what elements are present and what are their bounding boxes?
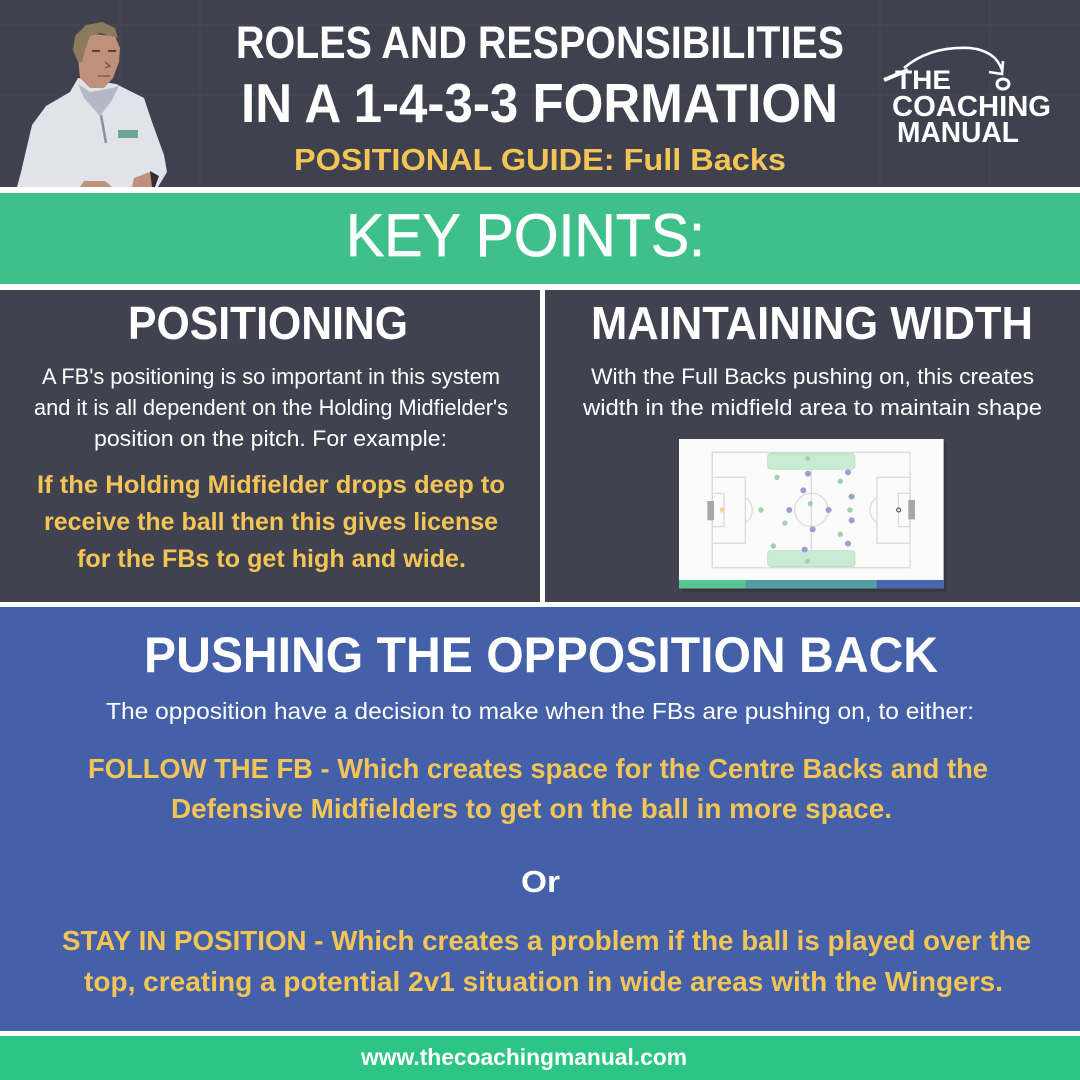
- logo: The Coaching Manual: COACHING: [892, 91, 1051, 123]
- text: positioning example: receive the ball then this gives license: [44, 508, 498, 536]
- panel: pushing the opposition back: [0, 607, 1080, 1031]
- heading: positioning: POSITIONING: [128, 297, 408, 349]
- text: positioning example: for the FBs to get high and wide.: [77, 545, 466, 573]
- footer: www.thecoachingmanual.com: [360, 1044, 687, 1070]
- text: stay in position: top, creating a potential 2v1 situation in wide areas with the Wingers.: [84, 966, 1003, 997]
- text: maintaining width description: [582, 364, 1042, 420]
- text: stay in position: [62, 925, 1031, 997]
- heading: maintaining width: MAINTAINING WIDTH: [591, 297, 1033, 349]
- text: maintaining width description: width in the midfield area to maintain shape: [582, 395, 1042, 420]
- text: positioning example: [37, 471, 505, 573]
- title: [236, 17, 844, 134]
- text: positioning description: A FB's positioning is so important in this system: [42, 364, 500, 389]
- text: positioning description: position on the pitch. For example:: [94, 426, 447, 451]
- heading: pushing the opposition back: PUSHING THE OPPOSITION BACK: [144, 627, 938, 683]
- key points banner: KEY POINTS:: [346, 202, 705, 269]
- text: intro: The opposition have a decision to make when the FBs are pushing on, to either:: [106, 698, 974, 724]
- title: IN A 1-4-3-3 FORMATION: [241, 72, 838, 134]
- footer: [0, 1036, 1080, 1080]
- pitch diagram: [679, 439, 946, 592]
- logo: The Coaching Manual: [884, 48, 1051, 149]
- text: positioning description: and it is all dependent on the Holding Midfielder's: [34, 395, 508, 420]
- text: positioning description: [34, 364, 508, 451]
- text: follow the FB: [88, 753, 988, 824]
- text: follow the FB: FOLLOW THE FB - Which creates space for the Centre Backs and the: [88, 753, 988, 784]
- key points banner: [0, 193, 1080, 284]
- logo: The Coaching Manual: MANUAL: [897, 117, 1019, 149]
- title: ROLES AND RESPONSIBILITIES: [236, 17, 844, 68]
- text: follow the FB: Defensive Midfielders to get on the ball in more space.: [171, 793, 892, 824]
- panel: maintaining width: [545, 290, 1080, 602]
- text: or: Or: [521, 864, 560, 899]
- panel: positioning: [0, 290, 540, 602]
- logo: The Coaching Manual: THE: [895, 65, 951, 95]
- text: maintaining width description: With the Full Backs pushing on, this creates: [591, 364, 1034, 389]
- text: positioning example: If the Holding Midfielder drops deep to: [37, 471, 505, 499]
- header panel: [0, 0, 1080, 187]
- text: stay in position: STAY IN POSITION - Which creates a problem if the ball is played over the: [62, 925, 1031, 956]
- subtitle: POSITIONAL GUIDE: Full Backs: [294, 142, 786, 177]
- photo: coach: [17, 22, 167, 187]
